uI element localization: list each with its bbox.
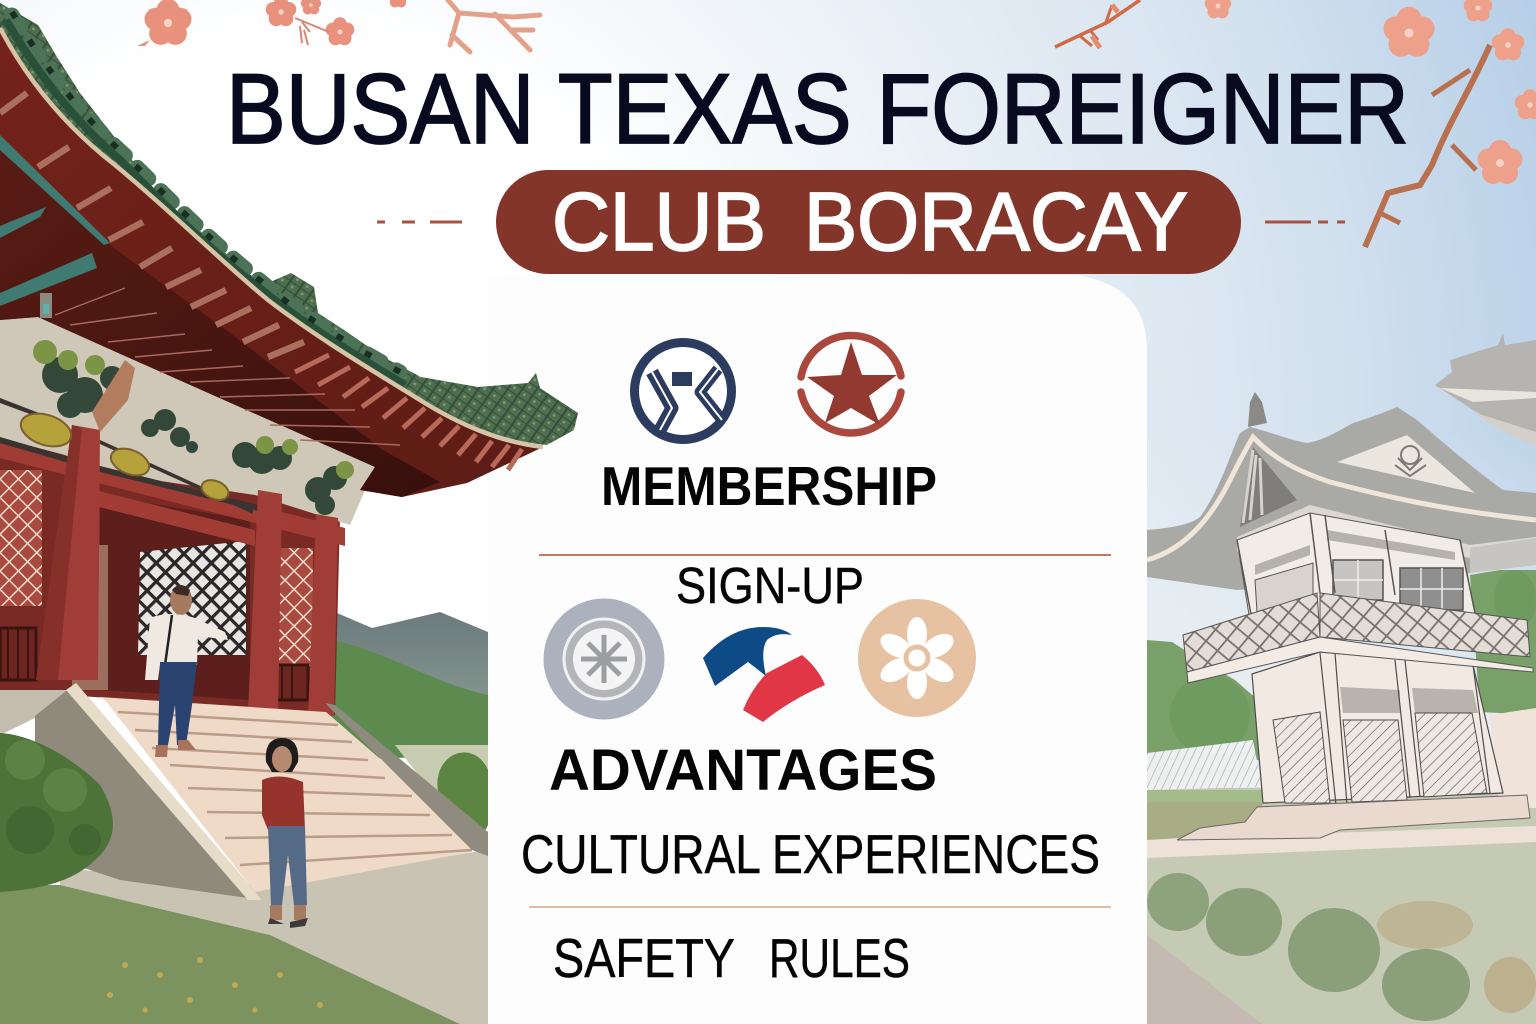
roof dark ridge — [6, 20, 405, 385]
right background scene: faded pavilion garden — [1140, 333, 1536, 1024]
title: BUSAN TEXAS FOREIGNER — [226, 53, 1409, 164]
icon: peach flower — [858, 599, 976, 717]
grass — [0, 885, 460, 1024]
icon: grey medallion — [544, 598, 664, 720]
distant trees — [1140, 570, 1536, 760]
heading: safety rules: SAFETY — [553, 927, 735, 989]
pavilion balcony railing — [1183, 593, 1530, 672]
pavilion ground storey — [1252, 652, 1503, 805]
roof soffit inner panel — [0, 137, 440, 497]
forest hill — [330, 640, 488, 760]
mountains — [330, 610, 488, 720]
content panel — [488, 275, 1147, 1024]
painted trees — [42, 357, 347, 515]
balcony floor slab — [1187, 637, 1533, 683]
icon: navy emblem — [634, 342, 732, 440]
roof tile spots — [12, 12, 400, 372]
cherry blossoms top left — [137, 0, 408, 46]
red lintels — [0, 440, 345, 546]
shrubs — [1147, 873, 1536, 1021]
stone fence — [1147, 740, 1262, 790]
lantern — [40, 293, 52, 318]
back wall — [0, 430, 340, 715]
wall behind stairs — [395, 745, 488, 790]
left dashes — [377, 220, 462, 224]
thin soffit lines — [55, 288, 400, 445]
entrance stairs — [0, 683, 488, 900]
teal beams — [0, 135, 110, 306]
roof cream edge — [0, 28, 543, 447]
temple roof — [0, 3, 578, 497]
heading: cultural experiences: CULTURAL EXPERIENCES — [521, 823, 1100, 885]
right cheek wall — [325, 703, 488, 856]
far right pagoda roof — [1435, 333, 1536, 447]
roof soffit outer band — [0, 28, 543, 497]
heading: advantages: ADVANTAGES — [549, 738, 937, 803]
heading: safety rules: RULES — [769, 927, 910, 989]
lawn and path — [1147, 788, 1536, 1024]
cherry branch top right — [1055, 0, 1536, 247]
pavilion upper storey — [1237, 513, 1475, 640]
divider — [539, 554, 1111, 556]
person: woman on lower steps — [262, 738, 308, 928]
frieze ornaments — [17, 340, 354, 515]
left cheek wall — [0, 690, 75, 735]
step treads — [100, 697, 472, 892]
heading: sign-up: SIGN-UP — [676, 557, 864, 614]
pavilion stone base — [1177, 795, 1530, 840]
painted frieze — [0, 317, 375, 525]
subtitle pill: CLUB — [552, 175, 766, 268]
side wall — [1490, 708, 1536, 808]
pinnacle — [1248, 392, 1267, 427]
temple building — [0, 317, 375, 716]
left scene ground and hills — [0, 610, 488, 1024]
heading: membership: MEMBERSHIP — [601, 455, 937, 517]
icon: red star emblem — [801, 336, 901, 433]
person: visitor on upper steps — [145, 585, 228, 757]
cherry branch top centre — [448, 0, 540, 52]
roof bumps — [12, 15, 400, 372]
main pavilion roof — [1147, 392, 1536, 590]
bush — [0, 733, 113, 892]
red posts — [36, 425, 338, 716]
rafters — [0, 93, 522, 470]
green tiled roof edge — [0, 3, 578, 445]
heading: safety rules — [553, 927, 910, 989]
gravel path — [60, 850, 488, 1024]
icon: blue and red swoosh — [703, 627, 825, 722]
subtitle pill: BORACAY — [804, 175, 1188, 268]
lattice panels — [0, 470, 313, 666]
lower door slats — [0, 628, 308, 700]
divider — [529, 906, 1111, 908]
right dashes — [1265, 220, 1345, 224]
subtitle pill — [496, 170, 1241, 274]
